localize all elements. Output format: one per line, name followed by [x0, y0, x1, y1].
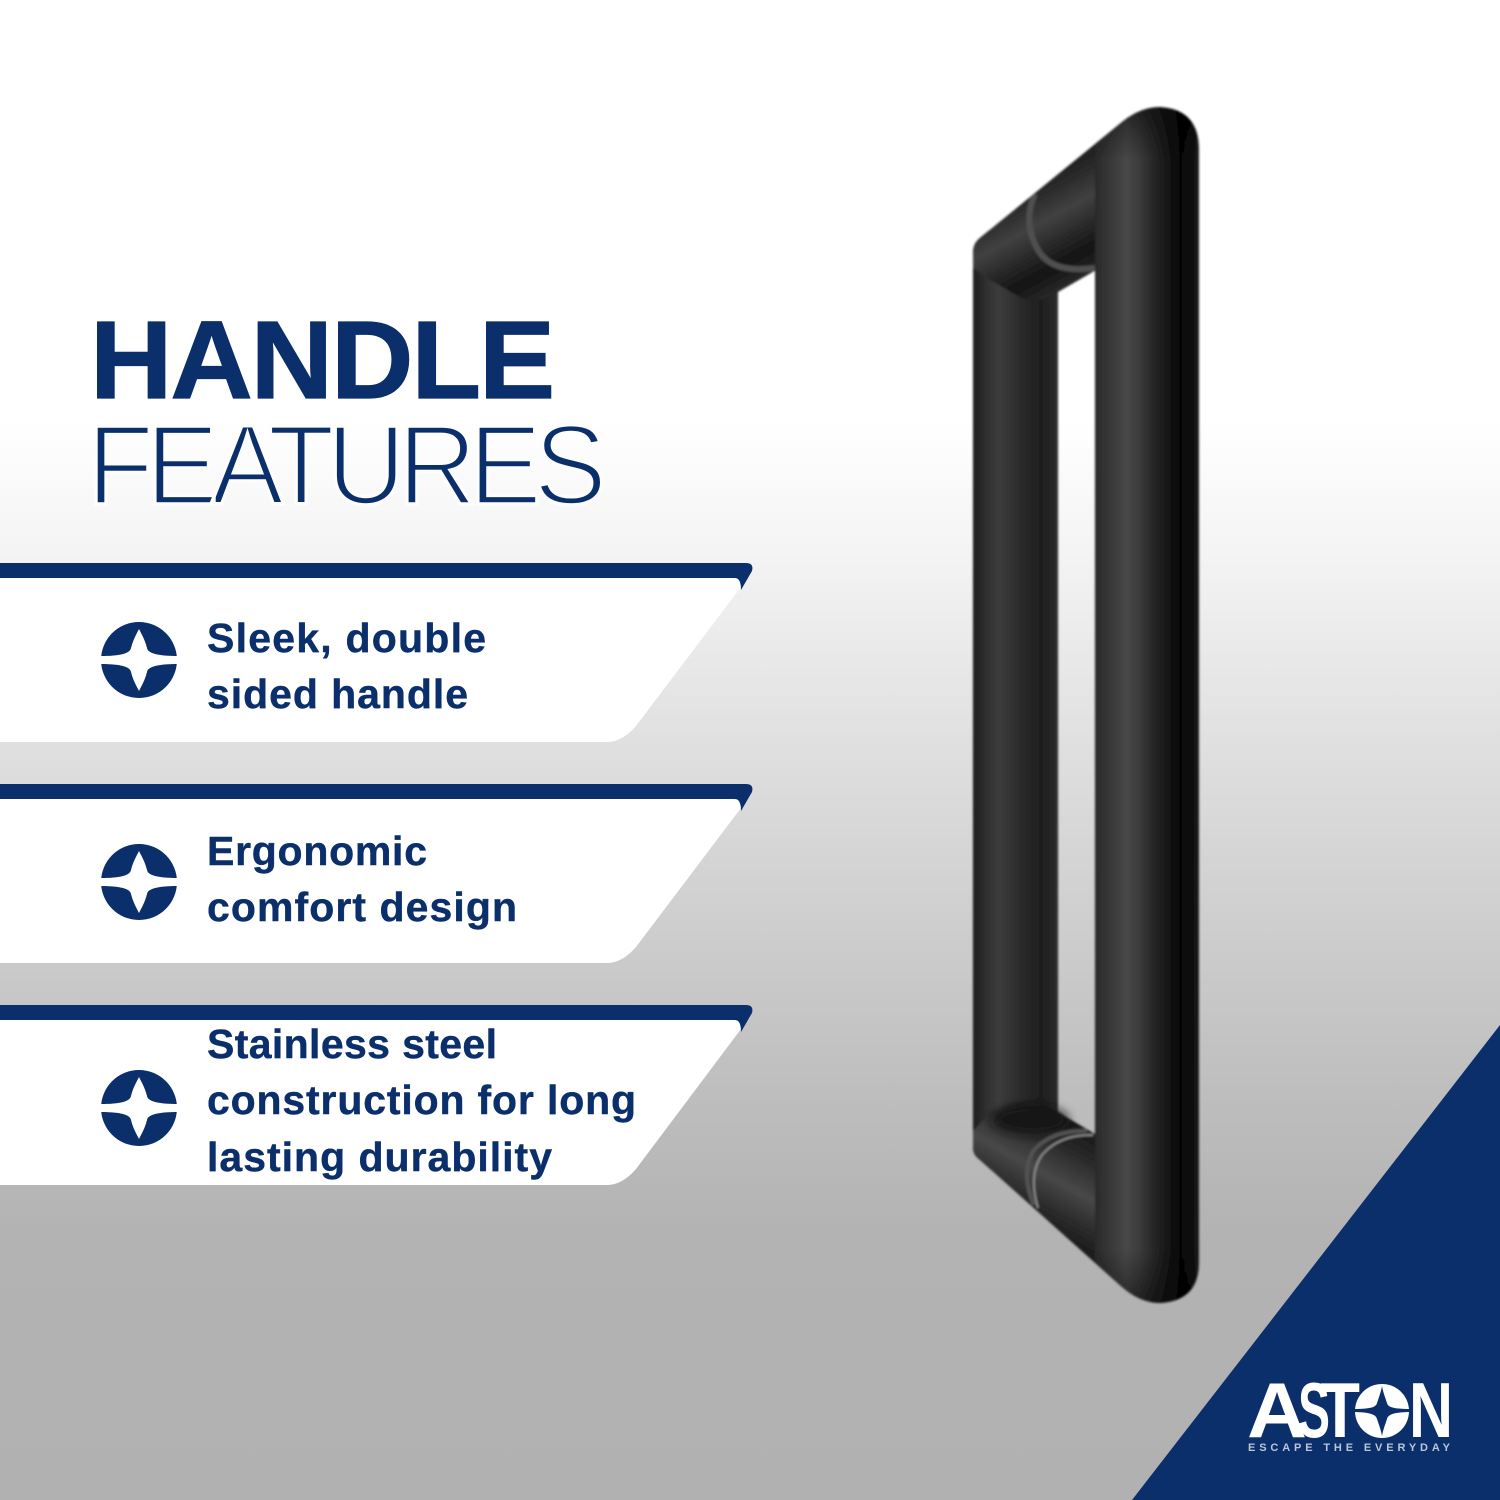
logo letter T: T [1320, 1366, 1360, 1454]
top collar ring [1029, 194, 1095, 269]
logo star O [1352, 1384, 1412, 1438]
logo letter N: N [1409, 1366, 1453, 1454]
logo letter S: S [1298, 1366, 1330, 1454]
left vertical bar [973, 230, 1058, 1170]
icon: star circle [100, 844, 178, 920]
bottom connector shadow [992, 1106, 1068, 1134]
text block: sided handle [207, 671, 468, 717]
panel body [0, 796, 750, 963]
corner triangle [1132, 1025, 1500, 1500]
panel: feature 3 [0, 1005, 752, 1185]
text block: lasting durability [207, 1134, 552, 1180]
text block: comfort design [207, 884, 517, 930]
panel body [0, 1017, 750, 1185]
panel top bar [0, 784, 752, 811]
panel top bar [0, 563, 752, 590]
bottom collar highlight [1034, 1135, 1093, 1208]
text block [207, 828, 517, 930]
icon: star circle [100, 1070, 178, 1146]
panel top bar [0, 1005, 752, 1032]
panel: feature 1 [0, 563, 752, 742]
text block: Stainless steel [207, 1021, 497, 1067]
panel body [0, 575, 750, 742]
text block: Ergonomic [207, 828, 427, 874]
logo letter A: A [1247, 1366, 1307, 1454]
title [87, 299, 602, 528]
panel: feature 2 [0, 784, 752, 963]
text block: construction for long [207, 1077, 636, 1123]
text block: Sleek, double [207, 615, 486, 661]
main vertical bar [1095, 100, 1199, 1310]
title line: HANDLE: HANDLE [90, 299, 553, 422]
top connector [965, 105, 1130, 300]
bottom collar ring [1027, 1131, 1087, 1205]
title line: FEATURES: FEATURES [87, 402, 602, 528]
bottom connector [972, 1100, 1097, 1264]
text block [207, 615, 486, 717]
text block [207, 1021, 636, 1180]
logo tagline: ESCAPE THE EVERYDAY [1248, 1442, 1451, 1454]
door handle [965, 100, 1199, 1320]
main bar end shading [1095, 100, 1199, 1310]
icon: star circle [100, 622, 178, 698]
logo [1247, 1366, 1453, 1454]
